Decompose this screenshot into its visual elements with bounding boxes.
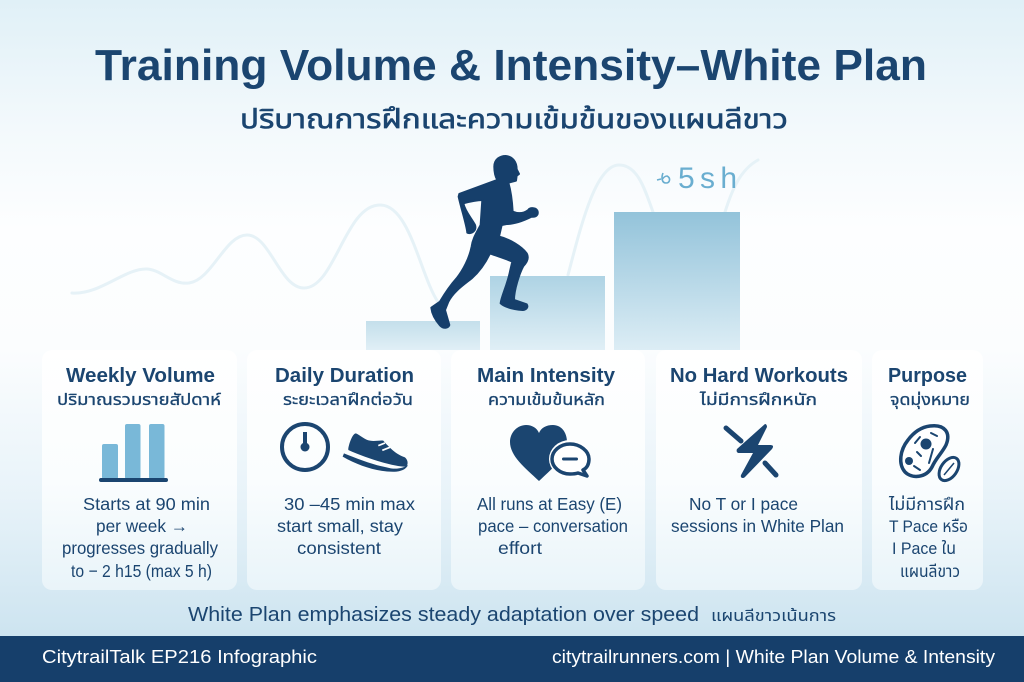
progress wave [72, 160, 758, 302]
icon: bean and seed [901, 426, 963, 484]
Thai heading: ระยะเวลาฝึกต่อวัน [283, 391, 413, 409]
Thai heading: ความเข้มข้นหลัก [488, 392, 605, 409]
body text: Starts at 90 min [83, 494, 210, 514]
heading: Purpose [888, 364, 967, 387]
takeaway caption: แผนลีขาวเน้นการ [711, 608, 836, 625]
step 3 [614, 212, 740, 350]
heading: No Hard Workouts [670, 364, 848, 387]
title: Training Volume & Intensity–White Plan [95, 41, 927, 90]
panel: main intensity [451, 350, 645, 590]
body text [277, 494, 415, 558]
body text: 30 –45 min max [284, 494, 415, 514]
footer left text: CitytrailTalk EP216 Infographic [42, 646, 317, 667]
body text: consistent [297, 538, 381, 558]
icon: crossed-out lightning bolt [726, 424, 776, 478]
5 s h label: 5 s h [678, 162, 737, 195]
Thai heading: จุดมุ่งหมาย [890, 391, 970, 409]
Thai heading: ปริมาณรวมรายสัปดาห์ [57, 392, 221, 409]
body text [477, 494, 628, 558]
panel: daily duration [247, 350, 441, 590]
heading: Main Intensity [477, 364, 616, 387]
icon: running shoe [343, 433, 408, 472]
body text: แผนลีขาว [900, 563, 960, 581]
body text [888, 496, 968, 581]
body text: No T or I pace [689, 494, 798, 514]
body text: to − 2 h15 (max 5 h) [71, 561, 212, 581]
icon: heart and speech bubble [510, 425, 591, 481]
footer right text: citytrailrunners.com | White Plan Volume & Intensity [552, 646, 996, 667]
body text [62, 494, 218, 581]
runner silhouette [431, 156, 538, 328]
step 1 [366, 321, 480, 350]
icon: bar chart [99, 424, 168, 482]
body text: progresses gradually [62, 538, 218, 558]
panel: weekly volume [42, 350, 237, 590]
body text: pace – conversation [478, 516, 628, 536]
body text: per week → [96, 516, 188, 536]
heading: Daily Duration [275, 364, 414, 387]
body text: I Pace ใน [892, 540, 956, 558]
icon: stopwatch [282, 424, 328, 470]
body text: All runs at Easy (E) [477, 494, 622, 514]
step 2 [490, 276, 605, 350]
body text: effort [498, 538, 542, 558]
body text [671, 494, 844, 536]
panel: no hard workouts [656, 350, 862, 590]
body text: ไม่มีการฝึก [888, 496, 965, 514]
heading: Weekly Volume [66, 364, 215, 387]
body text: sessions in White Plan [671, 516, 844, 536]
footer bar [0, 636, 1024, 682]
Thai subtitle: ปริบาณการฝึกและความเข้มข้นของแผนลีขาว [240, 104, 788, 134]
panel: purpose [872, 350, 983, 590]
body text: start small, stay [277, 516, 403, 536]
body text: T Pace หรือ [889, 518, 968, 536]
hero illustration: progress wave, steps and runner [72, 156, 758, 350]
takeaway caption: White Plan emphasizes steady adaptation over speed [188, 603, 699, 626]
Thai heading: ไม่มีการฝึกหนัก [699, 391, 817, 409]
